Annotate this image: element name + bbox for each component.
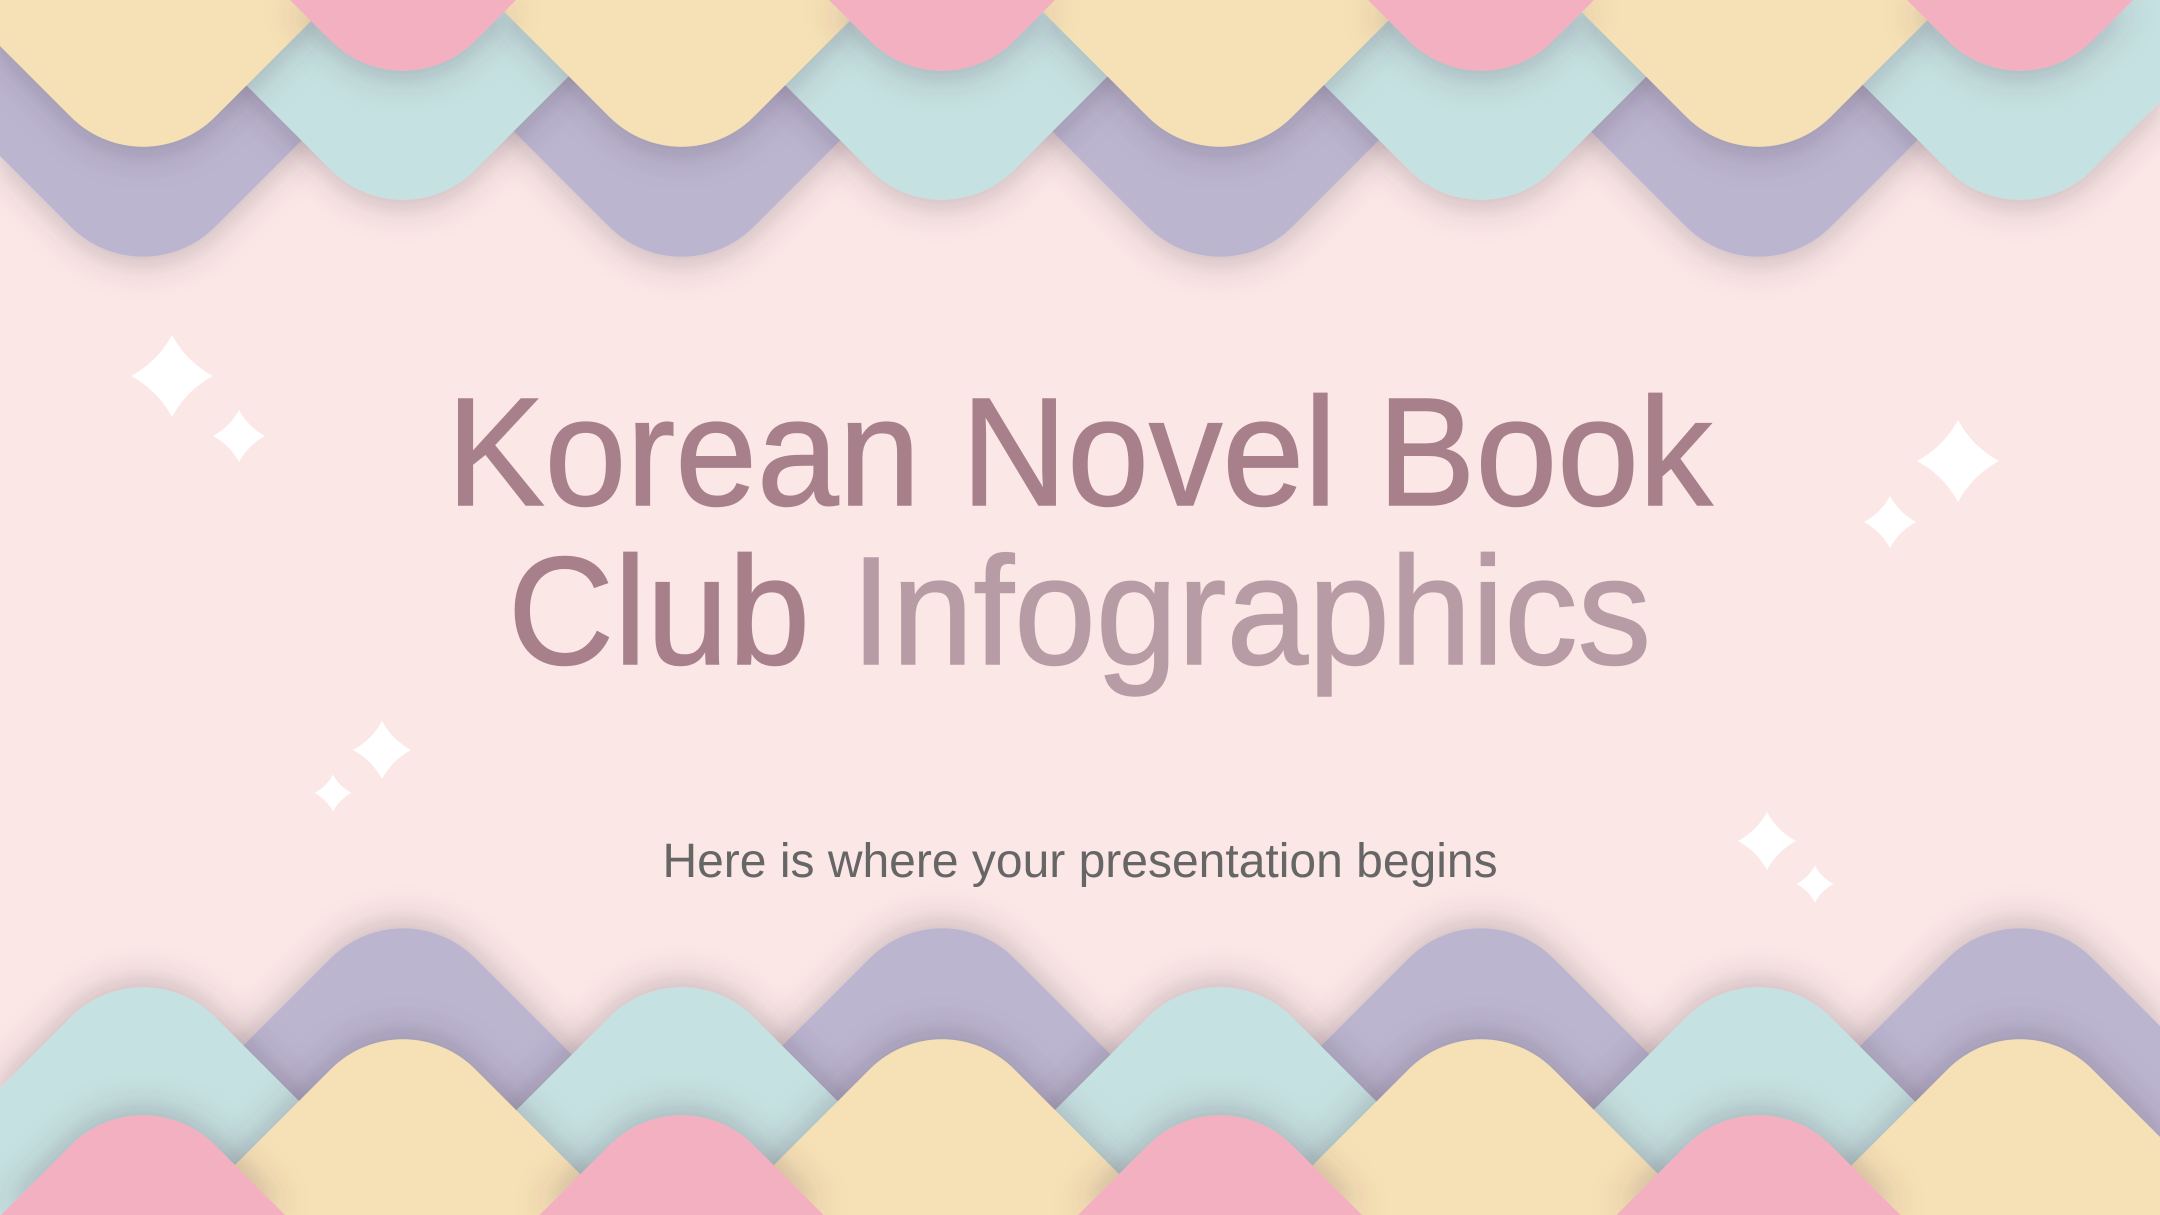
title: Korean Novel Book bbox=[447, 366, 1713, 538]
subtitle: Here is where your presentation begins bbox=[662, 835, 1498, 888]
sparkles: upper right bbox=[1864, 420, 1999, 548]
sparkles: lower right bbox=[1738, 812, 1834, 902]
top teal layer bbox=[161, 0, 2160, 200]
top pink layer bbox=[290, 0, 2133, 71]
sparkles: lower left bbox=[314, 721, 411, 812]
top scalloped border bbox=[0, 0, 2160, 257]
bottom yellow layer bbox=[185, 1039, 2160, 1215]
title: Club Infographics bbox=[508, 525, 1651, 697]
bottom teal layer bbox=[0, 987, 2028, 1215]
top yellow layer bbox=[0, 0, 1948, 147]
sparkles: upper left bbox=[131, 335, 265, 462]
bottom pink layer bbox=[1, 1115, 1900, 1215]
bottom scalloped border bbox=[0, 928, 2160, 1215]
bottom purple layer bbox=[74, 928, 2160, 1215]
top purple layer bbox=[0, 0, 2058, 257]
title bbox=[447, 366, 1713, 697]
